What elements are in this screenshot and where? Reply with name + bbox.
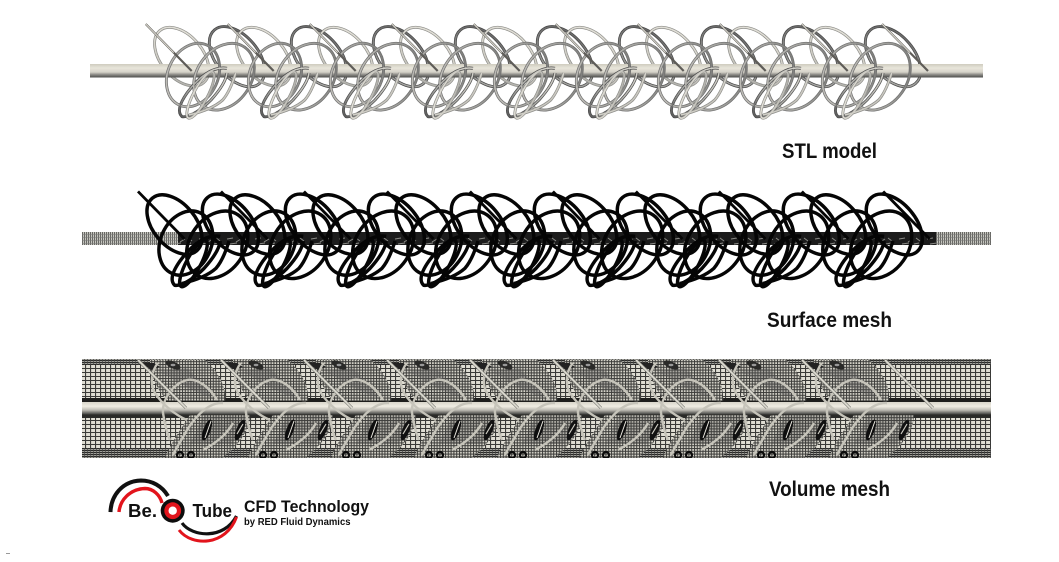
panel: surface mesh geometry xyxy=(82,184,991,290)
heading: Surface mesh: Surface mesh xyxy=(767,309,892,332)
logo tagline: by RED Fluid Dynamics xyxy=(244,517,351,528)
panel: STL model geometry xyxy=(90,16,983,122)
densely meshed tube section xyxy=(178,232,936,245)
small corner mark xyxy=(6,553,10,554)
coil sections xyxy=(152,363,897,455)
icon: upper arcs xyxy=(110,480,168,512)
logo tagline: CFD Technology xyxy=(244,497,370,516)
black meshed coils xyxy=(136,184,933,290)
panel: volume mesh xyxy=(82,358,991,458)
background cut-plane grid xyxy=(82,365,991,448)
heading: Volume mesh: Volume mesh xyxy=(769,478,890,501)
coil inlet arms xyxy=(138,360,933,408)
logo tagline xyxy=(244,497,370,528)
heading: STL model: STL model xyxy=(782,140,877,163)
refined mesh around coils xyxy=(150,360,914,458)
logo wordmark: Be. xyxy=(128,501,157,521)
logo wordmark: Tube xyxy=(192,501,232,521)
central tube, STL xyxy=(90,64,983,78)
icon: lower swooshes xyxy=(179,516,236,541)
meshed tube, left and right ends xyxy=(82,232,991,245)
logo wordmark xyxy=(128,501,232,521)
central tube, volume mesh xyxy=(82,402,991,414)
icon: central ring xyxy=(161,499,185,523)
near-wall prism layers xyxy=(82,359,991,458)
dark refinement blobs xyxy=(140,358,911,458)
logo: Be.Tube CFD Technology xyxy=(110,480,370,541)
